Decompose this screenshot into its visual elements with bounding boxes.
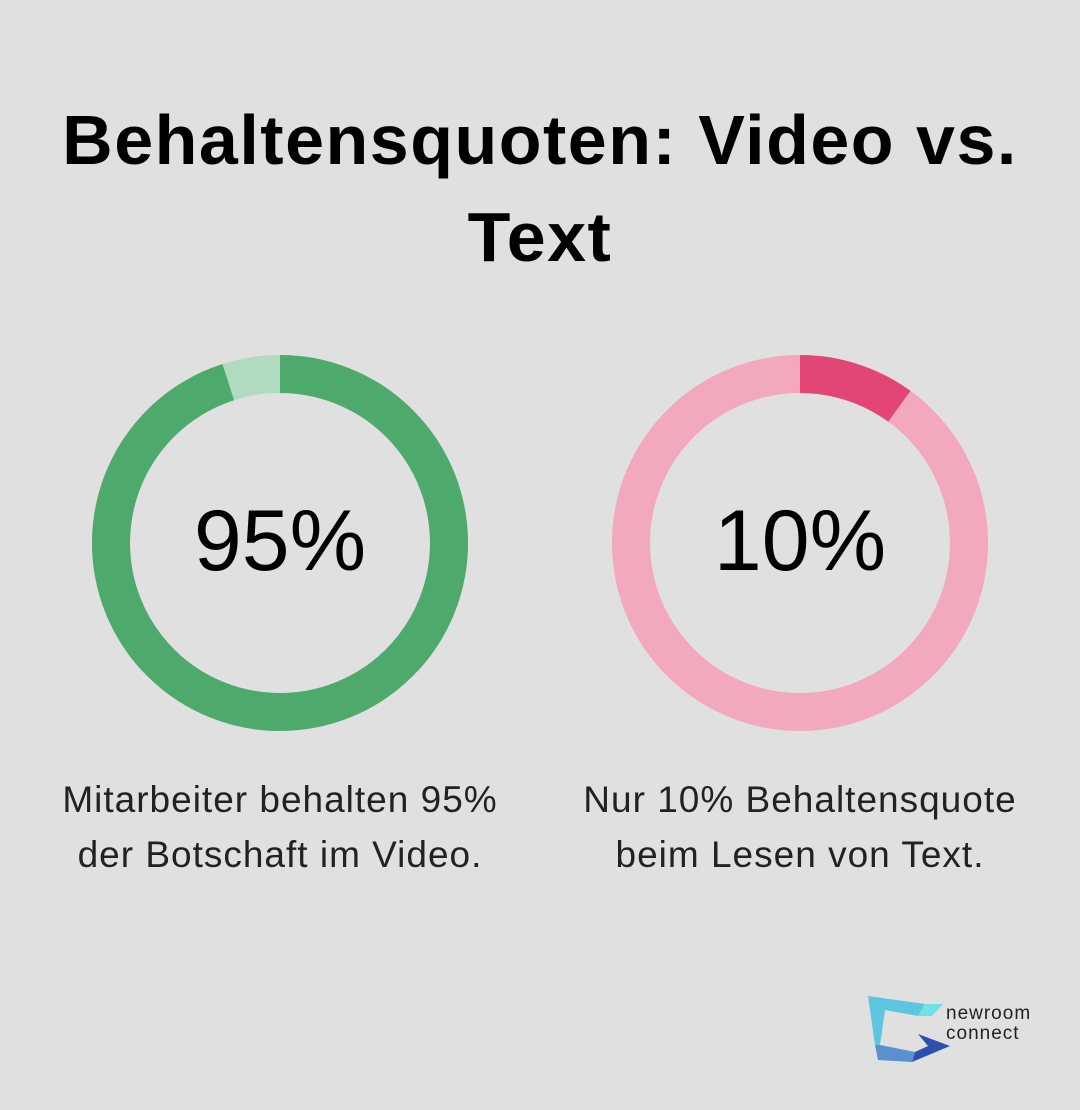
caption: text: beim Lesen von Text.: [616, 834, 984, 875]
logo text: newroom: [946, 1003, 1031, 1024]
title: Text: [468, 198, 612, 276]
title: Behaltensquoten: Video vs.: [62, 101, 1018, 179]
logo text: [946, 1003, 1031, 1044]
logo text: connect: [946, 1023, 1020, 1044]
donut: 10%: 10%: [714, 493, 886, 589]
logo icon: [868, 996, 950, 1062]
caption: video: Mitarbeiter behalten 95%: [62, 779, 498, 820]
caption: video: der Botschaft im Video.: [78, 834, 482, 875]
title: [62, 101, 1018, 276]
caption: text: Nur 10% Behaltensquote: [583, 779, 1017, 820]
caption: text: [583, 779, 1017, 875]
caption: video: [62, 779, 498, 875]
donut: 95%: [111, 374, 449, 712]
donut: 10%: [631, 374, 969, 712]
donut: 95%: 95%: [194, 493, 366, 589]
